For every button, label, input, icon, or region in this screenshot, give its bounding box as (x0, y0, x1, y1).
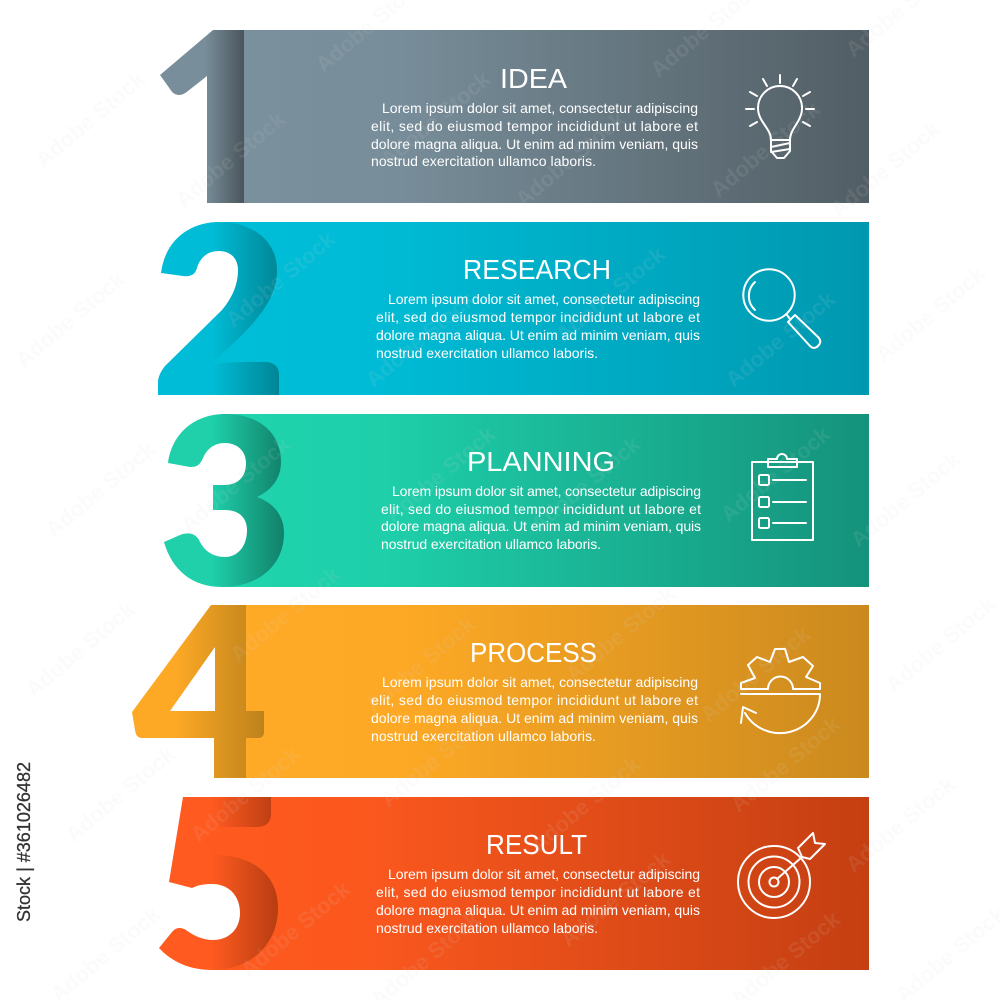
text block: result: Lorem ipsum dolor sit amet, consectetur adipiscing (388, 866, 700, 882)
icon: gear with cycle arrow (741, 649, 820, 733)
text block: idea: dolore magna aliqua. Ut enim ad minim veniam, quis (371, 136, 698, 152)
side label: stock id: Stock | #361026482 (14, 762, 34, 922)
panel: step 2 research (158, 222, 869, 395)
text block: research: elit, sed do eiusmod tempor incididunt ut labore et (376, 309, 700, 325)
panel: step 1 idea (160, 30, 869, 203)
text block: idea: nostrud exercitation ullamco laboris. (371, 153, 596, 169)
panel: step 3 planning (164, 414, 869, 587)
band 3 background (225, 414, 869, 587)
text block: process: Lorem ipsum dolor sit amet, consectetur adipiscing (382, 674, 698, 690)
text block: result: elit, sed do eiusmod tempor incididunt ut labore et (376, 884, 700, 900)
watermark: adobe stock pattern: Adobe Stock (881, 591, 1000, 697)
heading: process: PROCESS (470, 637, 597, 668)
watermark: adobe stock pattern: Adobe Stock (561, 581, 680, 687)
text block: result: dolore magna aliqua. Ut enim ad minim veniam, quis (376, 902, 700, 918)
text block: planning: Lorem ipsum dolor sit amet, consectetur adipiscing (392, 483, 701, 499)
text block: research: Lorem ipsum dolor sit amet, consectetur adipiscing (388, 291, 700, 307)
watermark: adobe stock pattern: Adobe Stock (381, 421, 500, 527)
watermark: adobe stock pattern: Adobe Stock (11, 266, 130, 372)
text block: planning (381, 483, 701, 552)
heading: result: RESULT (486, 829, 587, 860)
icon: light bulb (746, 75, 814, 158)
watermark: adobe stock pattern: Adobe Stock (716, 421, 835, 527)
watermark: adobe stock pattern: Adobe Stock (41, 436, 160, 542)
watermark: adobe stock pattern: Adobe Stock (376, 66, 495, 172)
watermark: adobe stock pattern: Adobe Stock (31, 66, 150, 172)
text block: process: dolore magna aliqua. Ut enim ad minim veniam, quis (371, 710, 698, 726)
watermark: adobe stock pattern: Adobe Stock (61, 741, 180, 847)
text block: process: elit, sed do eiusmod tempor incididunt ut labore et (371, 692, 698, 708)
watermark: adobe stock pattern: Adobe Stock (846, 446, 965, 552)
numeral 5 (159, 797, 278, 970)
watermark: adobe stock pattern: Adobe Stock (21, 596, 140, 702)
watermark: adobe stock pattern: Adobe Stock (526, 431, 645, 537)
watermark: adobe stock pattern: Adobe Stock (221, 226, 340, 332)
panel: step 4 process (132, 605, 869, 778)
band 4 background (246, 605, 869, 778)
text block: idea: Lorem ipsum dolor sit amet, consectetur adipiscing (382, 100, 698, 116)
text block: result (376, 866, 700, 936)
text block: research (376, 291, 700, 361)
icon: clipboard checklist (752, 454, 813, 540)
numeral 1 (160, 30, 244, 203)
watermark: adobe stock pattern: Adobe Stock (841, 771, 960, 877)
watermark: adobe stock pattern: Adobe Stock (361, 286, 480, 392)
text block: process (371, 674, 698, 744)
numeral 4 (132, 605, 264, 778)
numeral 2 (158, 222, 279, 395)
text block: research: dolore magna aliqua. Ut enim ad minim veniam, quis (376, 327, 700, 343)
band 5 background (195, 797, 869, 970)
watermark: adobe stock pattern: Adobe Stock (511, 106, 630, 212)
watermark: adobe stock pattern: Adobe Stock (376, 706, 495, 812)
heading: research: RESEARCH (463, 254, 611, 285)
watermark: adobe stock pattern: Adobe Stock (871, 261, 990, 367)
band 2 background (170, 222, 869, 395)
text block: process: nostrud exercitation ullamco laboris. (371, 728, 596, 744)
text block: planning: elit, sed do eiusmod tempor incididunt ut labore et (381, 501, 701, 517)
watermark: adobe stock pattern: Adobe Stock (171, 106, 290, 212)
watermark: adobe stock pattern: Adobe Stock (236, 876, 355, 982)
band 1 background (244, 30, 869, 203)
watermark: adobe stock pattern: Adobe Stock (826, 116, 945, 222)
watermark: adobe stock pattern: Adobe Stock (726, 711, 845, 817)
watermark: adobe stock pattern: Adobe Stock (186, 741, 305, 847)
watermark: adobe stock pattern: Adobe Stock (706, 96, 825, 202)
text block: research: nostrud exercitation ullamco laboris. (376, 345, 598, 361)
text block: idea: elit, sed do eiusmod tempor incididunt ut labore et (371, 118, 698, 134)
text block: result: nostrud exercitation ullamco laboris. (376, 920, 598, 936)
icon: magnifying glass (743, 269, 820, 348)
panel: step 5 result (159, 797, 869, 970)
watermark: adobe stock pattern: Adobe Stock (361, 611, 480, 717)
watermark: adobe stock pattern: Adobe Stock (176, 431, 295, 537)
watermark: adobe stock pattern: Adobe Stock (551, 241, 670, 347)
icon: target with arrow (738, 833, 825, 918)
watermark: adobe stock pattern: Adobe Stock (696, 621, 815, 727)
watermark: adobe stock pattern: Adobe Stock (526, 751, 645, 857)
heading: idea: IDEA (500, 63, 567, 94)
watermark: adobe stock pattern: Adobe Stock (556, 846, 675, 952)
heading: planning: PLANNING (467, 446, 615, 477)
text block: planning: dolore magna aliqua. Ut enim ad minim veniam, quis (381, 518, 701, 534)
text block: planning: nostrud exercitation ullamco laboris. (381, 536, 601, 552)
numeral 3 (164, 414, 284, 587)
text block: idea (371, 100, 698, 169)
watermark: adobe stock pattern: Adobe Stock (721, 286, 840, 392)
watermark: adobe stock pattern: Adobe Stock (226, 561, 345, 667)
